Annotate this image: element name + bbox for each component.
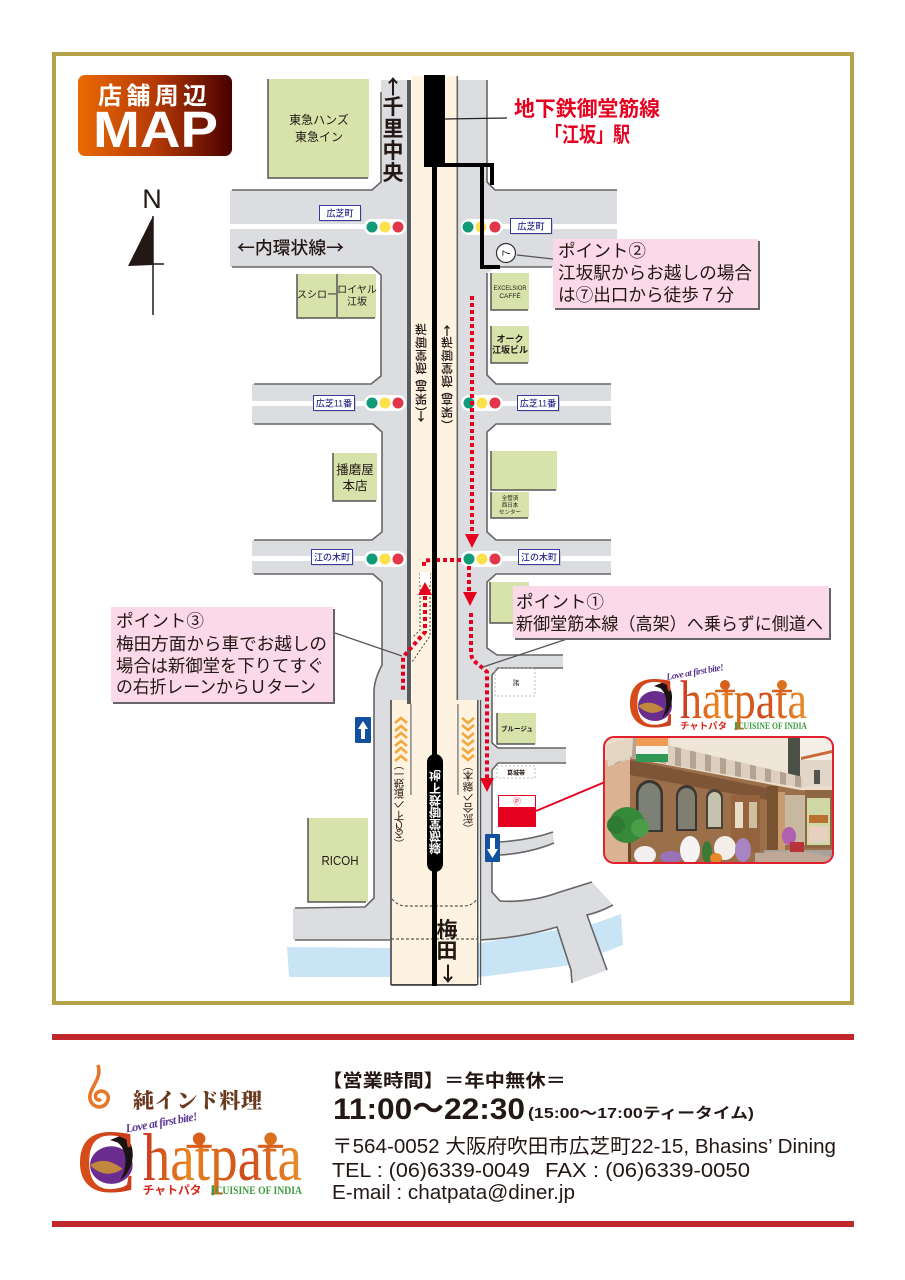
walking route (403, 296, 494, 792)
parking and shop marker (498, 796, 536, 827)
building blocks: ロイヤル (337, 285, 377, 296)
intersection name plates (312, 206, 561, 566)
building blocks: 江坂ビル (492, 344, 528, 355)
intersection name plates: 広芝11番 (520, 398, 556, 408)
footer logo: チャトパタ (143, 1184, 202, 1197)
building blocks: 東急ハンズ (289, 112, 349, 127)
footer business hours: 【営業時間】＝年中無休＝ (322, 1070, 566, 1091)
footer business hours: (15:00～17:00ティータイム) (528, 1105, 754, 1122)
vertical road labels: 新御堂筋︶高架︵ (441, 335, 453, 432)
footer contact details: FAX : (06)6339-0050 (545, 1160, 750, 1182)
building blocks: EXCELSIOR (494, 285, 527, 292)
intersection name plates: 広芝町 (326, 208, 354, 218)
footer contact details: TEL : (06)6339-0049 (332, 1160, 530, 1182)
vertical road labels: ↑ (383, 71, 403, 100)
footer logo: CUISINE OF INDIA (215, 1183, 302, 1197)
building blocks: 全管済 (502, 494, 519, 502)
vertical road labels: ︶一般道へ下りる︵ (394, 758, 405, 849)
building blocks: 東急イン (295, 129, 343, 144)
map frame (54, 54, 852, 1003)
shop logo: CUISINE OF INDIA (738, 722, 807, 732)
footer contact details: E-mail : chatpata@diner.jp (332, 1182, 575, 1204)
building blocks: スシロー (297, 290, 337, 301)
building blocks: 西日本 (502, 501, 519, 509)
vertical road labels: ↓ (415, 408, 427, 425)
vertical road labels: 梅田 (436, 919, 458, 963)
shop logo: チャトパタ (680, 720, 727, 731)
title badge: 店舗周辺 (98, 83, 207, 110)
parking and shop marker: Ⓟ (513, 797, 521, 806)
vertical road labels: ↓ (438, 958, 458, 987)
vertical road labels: 新御堂筋︶高架︵ (415, 322, 427, 419)
callout: point 2 (553, 239, 760, 310)
compass north arrow: N (142, 184, 162, 214)
vertical road labels: 千里中央 (382, 96, 404, 185)
building blocks: RICOH (322, 853, 358, 868)
station label (514, 98, 660, 147)
intersection name plates: 広芝11番 (316, 398, 352, 408)
expressway deck (390, 76, 481, 986)
footer logo: hatpata (143, 1120, 302, 1195)
shop logo: hatpata (680, 670, 807, 730)
traffic lights (364, 219, 503, 567)
building blocks: センター (499, 508, 521, 516)
footer logo: Love at first bite! (124, 1109, 199, 1136)
footer business hours: 11:00～22:30 (333, 1093, 525, 1126)
callout: point 3: の右折レーンからＵターン (116, 677, 316, 697)
intersection name plates: 江の木町 (314, 552, 350, 562)
building blocks: 本店 (342, 479, 368, 493)
station label leader (445, 118, 507, 119)
building blocks (268, 79, 557, 902)
callout: point 3: 場合は新御堂を下りてすぐ (116, 656, 324, 676)
footer business hours (322, 1070, 754, 1126)
building blocks: 江坂 (347, 295, 367, 308)
building blocks: 諸 (513, 678, 520, 687)
title badge (78, 75, 232, 158)
footer rule bottom (52, 1221, 854, 1227)
intersection name plates: 広芝町 (517, 220, 545, 232)
footer logo (76, 1109, 302, 1211)
callout: point 2: は⑦出口から徒歩７分 (558, 285, 734, 305)
footer rule top (52, 1034, 854, 1040)
redraw of connector over signal (480, 165, 484, 267)
footer tagline: 純インド料理 (133, 1089, 262, 1113)
ramp chevrons (395, 718, 474, 761)
footer logo: C (76, 1111, 136, 1211)
building blocks: ブルージュ (501, 724, 533, 733)
building blocks: 播磨屋 (336, 463, 374, 477)
building blocks: 葛城帯 (507, 769, 525, 777)
river (287, 914, 623, 977)
callout: point 1 (513, 586, 831, 640)
building blocks: CAFFÉ (499, 291, 521, 300)
vertical road labels: ︶本線へ合流︵ (463, 759, 474, 834)
vertical road labels: ↑ (441, 322, 453, 339)
compass north arrow (128, 184, 164, 315)
shop logo: Love at first bite! (665, 663, 725, 683)
exit 7 marker (496, 244, 516, 262)
callout: point 1: 新御堂筋本線（高架）へ乗らずに側道へ (516, 614, 823, 634)
callout: point 3: ポイント③ (116, 611, 204, 631)
footer contact details (332, 1135, 836, 1204)
callout: point 3 (111, 607, 335, 704)
callout: point 2: 江坂駅からお越しの場合 (558, 263, 752, 283)
callout: point 1: ポイント① (516, 592, 604, 612)
footer contact details: 〒564-0052 大阪府吹田市広芝町22-15, Bhasins’ Dining (332, 1135, 836, 1158)
shop logo: C (627, 663, 675, 743)
callout leaders (335, 255, 570, 667)
shop logo (627, 663, 807, 743)
subway line and station (424, 75, 500, 986)
cross street label: ←内環状線→ (237, 234, 344, 260)
shop photo (604, 737, 834, 864)
one-way signs (355, 717, 500, 862)
intersection name plates: 江の木町 (521, 552, 557, 562)
station label: 地下鉄御堂筋線 (514, 98, 660, 121)
vertical road labels (382, 71, 474, 987)
callout: point 2: ポイント② (558, 241, 646, 261)
station label: 「江坂」駅 (545, 124, 630, 147)
red leader to shop photo (536, 782, 605, 811)
title badge: MAP (93, 101, 218, 158)
exit 7 marker: 7 (501, 250, 513, 256)
building blocks: オーク (496, 334, 524, 344)
callout: point 3: 梅田方面から車でお越しの (116, 634, 327, 654)
vertical road labels: 地下鉄御堂筋線 (429, 768, 441, 856)
footer flame icon (90, 1065, 108, 1107)
road network (230, 80, 617, 983)
